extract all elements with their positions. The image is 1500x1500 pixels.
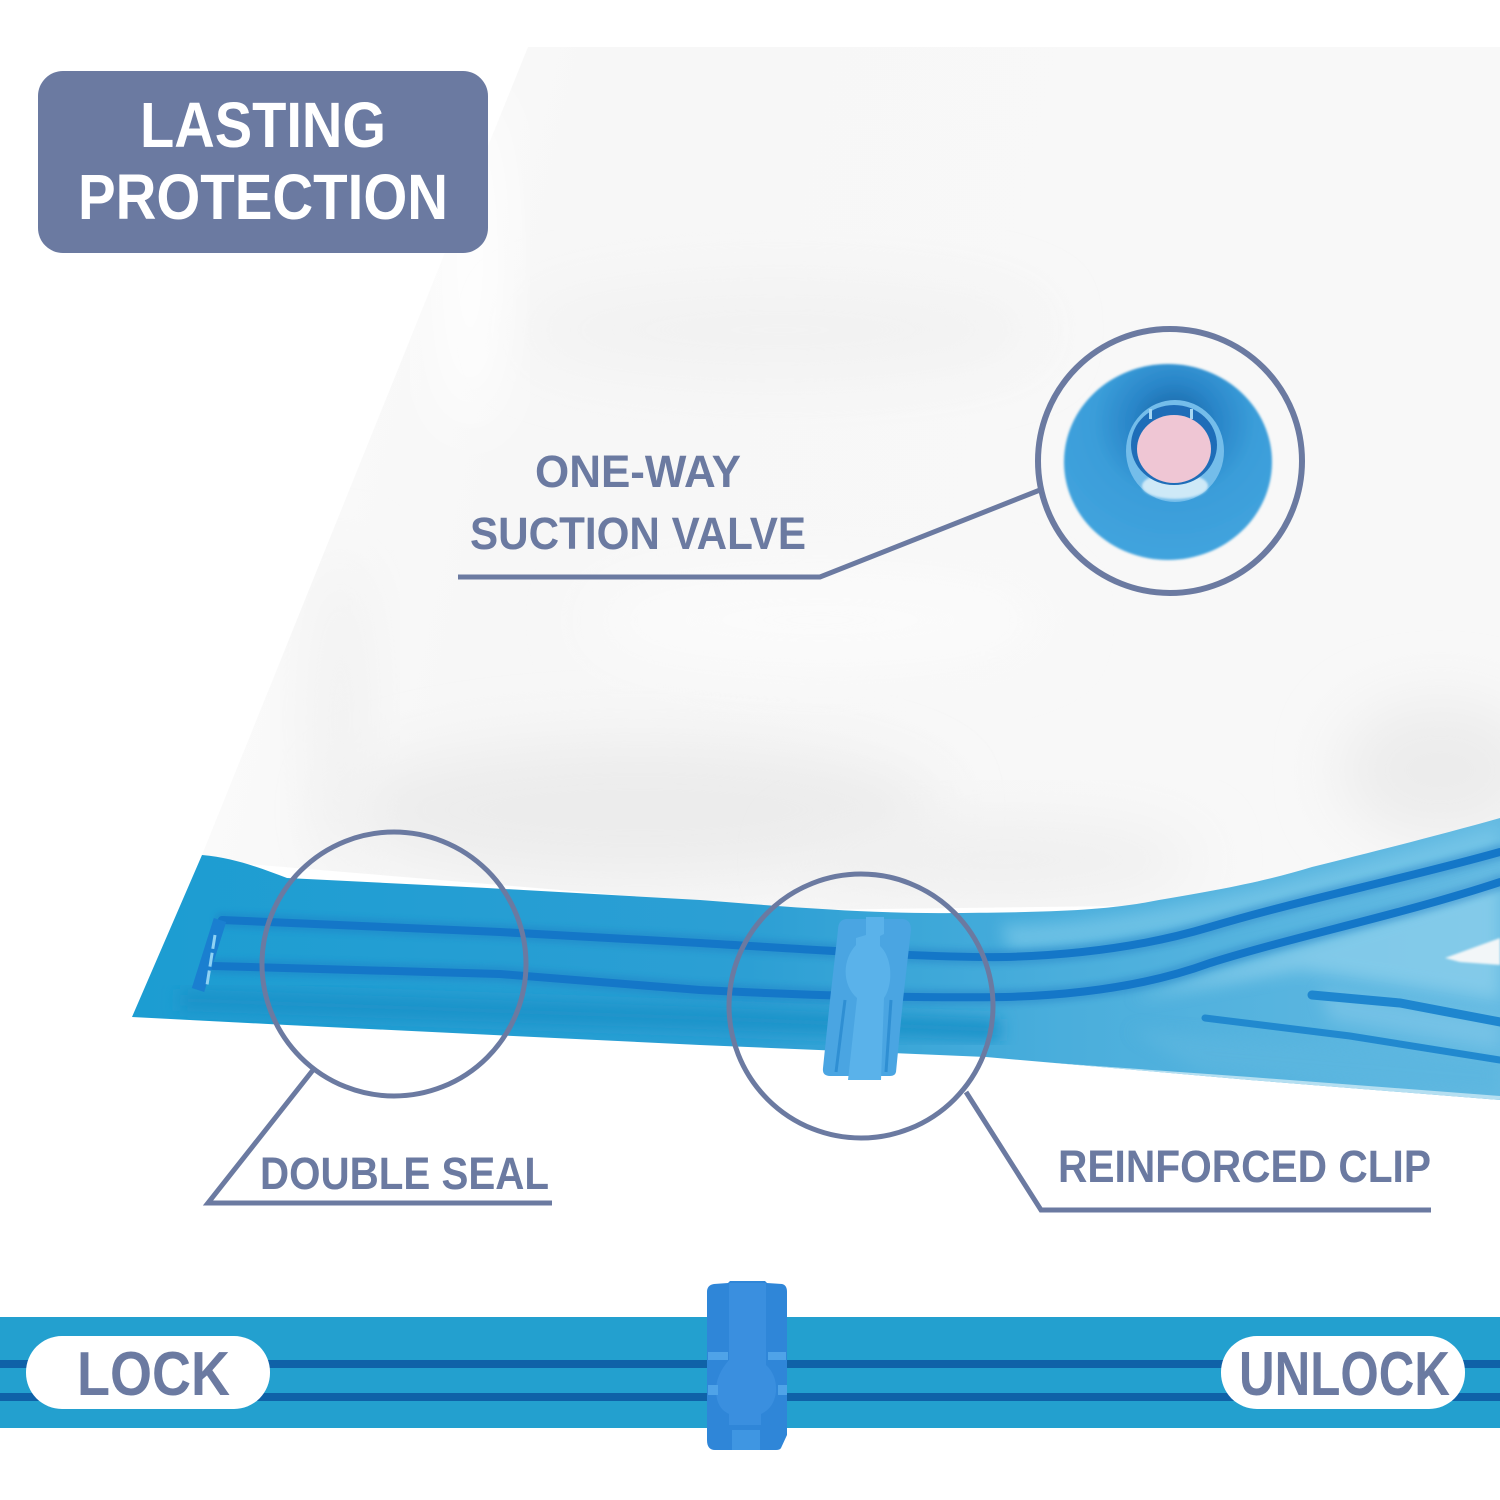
- label: one-way suction valve: SUCTION VALVE: [470, 508, 806, 559]
- icon: one-way valve: [1064, 364, 1272, 560]
- bottom zipper strip: [0, 1317, 1500, 1428]
- valve neck ring: [1126, 400, 1224, 502]
- vacuum bag film: [280, 230, 1500, 910]
- seal track lines: [213, 852, 1500, 1060]
- callout: clip leader: [966, 1092, 1431, 1210]
- label: reinforced clip: REINFORCED CLIP: [1058, 1141, 1431, 1192]
- badge title: LASTING: [140, 89, 386, 161]
- valve disc: [1064, 364, 1272, 560]
- label: one-way suction valve: ONE-WAY: [535, 446, 741, 497]
- icon: reinforced clip on bag: [823, 917, 911, 1080]
- valve pink membrane: [1137, 415, 1211, 483]
- badge: lasting protection: PROTECTION: [78, 161, 448, 233]
- lock pill: LOCK: [77, 1340, 230, 1409]
- callout circle: clip: [729, 874, 993, 1138]
- label: double seal: DOUBLE SEAL: [260, 1148, 549, 1199]
- callout: double seal leader: [208, 1070, 552, 1203]
- callout circle: double seal: [262, 832, 526, 1096]
- callout: one-way suction valve leader: [458, 490, 1040, 577]
- badge: lasting protection: [38, 71, 488, 253]
- icon: zipper slider clip: [707, 1281, 787, 1450]
- blue seal band: [132, 818, 1500, 1100]
- seal end stub: [198, 920, 220, 990]
- lock pill: [26, 1336, 270, 1409]
- callout circle: valve: [1038, 329, 1302, 593]
- unlock pill: UNLOCK: [1239, 1340, 1450, 1409]
- label: one-way suction valve: [470, 446, 806, 559]
